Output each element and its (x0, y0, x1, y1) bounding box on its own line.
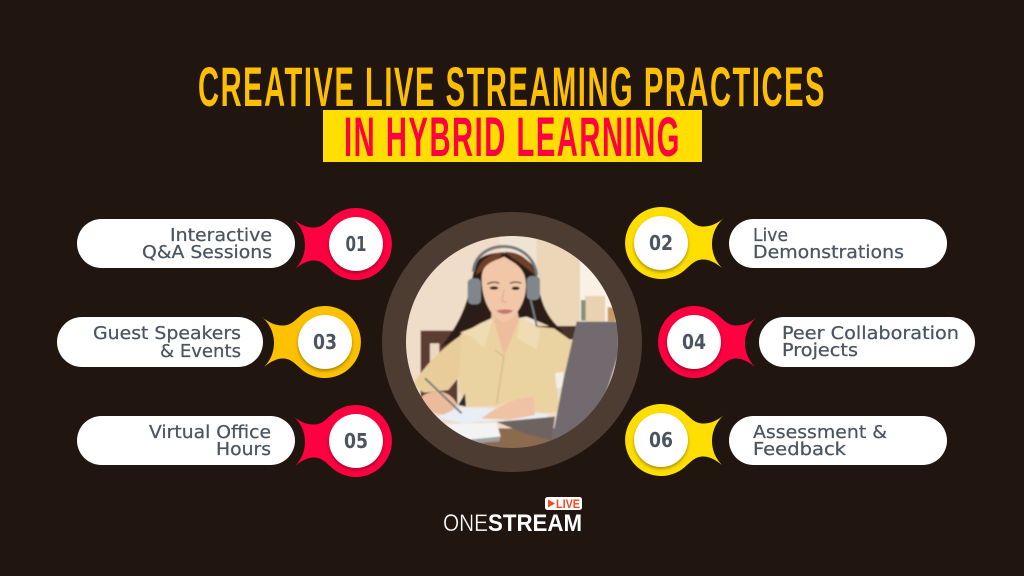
title line 2: IN HYBRID LEARNING (344, 105, 681, 168)
label 05 (149, 422, 271, 460)
item 01: Interactive Q&A Sessions (77, 208, 392, 280)
badge 01 (293, 208, 392, 280)
hair crown (476, 252, 535, 275)
label 01: Interactive (170, 225, 272, 246)
face (482, 257, 526, 322)
badge 04 (658, 306, 757, 378)
title highlight band (323, 110, 702, 162)
pill 05 (77, 416, 295, 465)
label 03: Guest Speakers (93, 323, 241, 344)
badge 02: 02 (649, 231, 673, 255)
headphones (473, 246, 537, 275)
item 02: Live Demonstrations (625, 207, 947, 279)
label 01: Q&A Sessions (142, 242, 272, 263)
pill 03 (57, 317, 263, 367)
badge 06: 06 (649, 428, 673, 452)
label 02: Live (753, 225, 788, 246)
label 04: Peer Collaboration (782, 323, 959, 344)
badge 03: 03 (313, 330, 337, 354)
torso (459, 317, 573, 413)
label 01 (142, 225, 272, 263)
hair back (441, 253, 565, 347)
badge 03 (262, 306, 361, 378)
label 03 (93, 323, 241, 362)
logo: OneStream Live (443, 497, 582, 537)
label 02: Demonstrations (753, 242, 904, 263)
neck (491, 310, 520, 358)
label 04 (782, 323, 959, 361)
logo wordmark: STREAM (488, 510, 582, 537)
pill 04 (759, 317, 975, 367)
badge 02 (625, 207, 724, 279)
badge 06 (625, 404, 724, 476)
laptop (497, 417, 555, 441)
label 06: Assessment & (753, 422, 887, 443)
label 06 (753, 422, 887, 460)
badge 01: 01 (346, 232, 366, 256)
central photo ring (382, 212, 642, 472)
desk (478, 427, 560, 448)
badge 04: 04 (682, 330, 706, 354)
left arm (413, 335, 462, 393)
logo wordmark: ONE (443, 510, 488, 537)
item 04: Peer Collaboration Projects (658, 306, 975, 378)
title (198, 55, 826, 168)
label 04: Projects (782, 340, 858, 361)
label 03: & Events (160, 341, 241, 362)
badge 05 (293, 405, 392, 477)
eyes and mouth (487, 282, 521, 284)
pill 01 (77, 219, 295, 268)
photo: student with headphones at laptop (403, 233, 623, 455)
item 05: Virtual Office Hours (77, 405, 392, 477)
label 02 (753, 225, 904, 263)
pill 02 (729, 219, 947, 268)
logo wordmark (443, 510, 582, 537)
hands (422, 391, 457, 415)
item 03: Guest Speakers & Events (57, 306, 361, 378)
logo LIVE badge: LIVE (556, 497, 580, 511)
badge 05: 05 (344, 429, 368, 453)
label 05: Hours (216, 439, 271, 460)
pill 06 (729, 416, 947, 465)
label 06: Feedback (753, 439, 847, 460)
label 05: Virtual Office (149, 422, 271, 443)
item 06: Assessment & Feedback (625, 404, 947, 476)
